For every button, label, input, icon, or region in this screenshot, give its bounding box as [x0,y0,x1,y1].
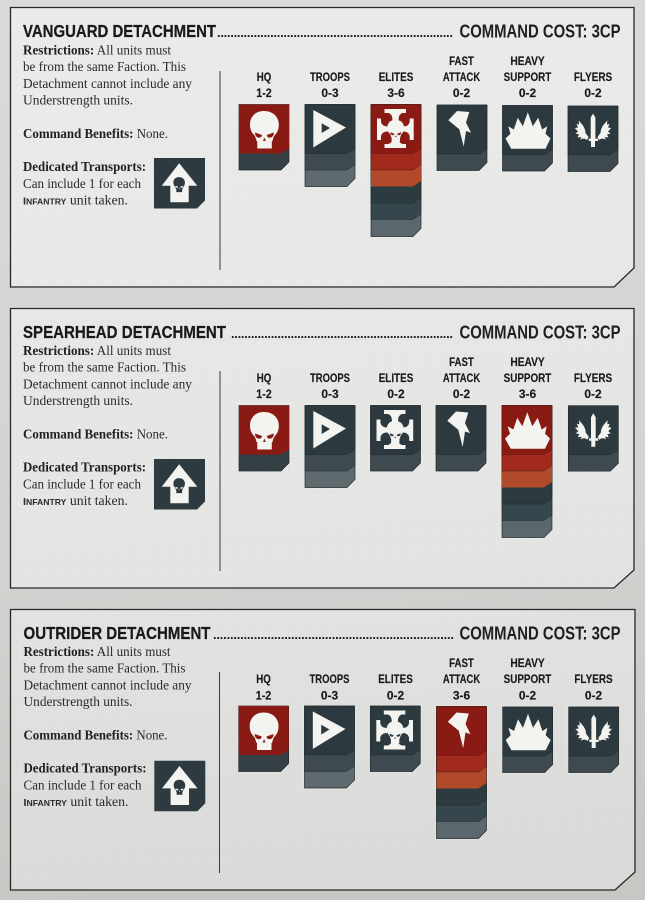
column: Troops: TROOPS [310,372,350,385]
column: Flyers: FLYERS [574,372,612,385]
column: Heavy Support: 3-6 [519,388,537,401]
column: Heavy Support: 0-2 [519,87,536,100]
column: Fast Attack: 3-6 [453,689,471,702]
column: Heavy Support [502,55,552,171]
text: restrictions [24,644,192,709]
leader dots: ................................................................... [231,326,453,341]
column: Flyers [568,372,618,471]
column: Troops: 0-3 [321,689,339,702]
column: Elites: 0-2 [387,388,405,401]
text: dedicated transports: Can include 1 for each [24,778,142,792]
column: Elites [370,673,420,772]
text: command benefits: Command Benefits: None. [23,126,168,141]
icon: dedicated transport arrow [154,158,205,208]
text: command benefits: Command Benefits: None. [23,426,168,442]
column: Troops [304,673,354,788]
heading: VANGUARD DETACHMENT [23,21,216,41]
text: dedicated transports: Can include 1 for each [23,176,141,191]
column: Fast Attack: ATTACK [443,71,481,84]
panel: outrider detachment [10,610,635,890]
column: Elites [371,71,421,236]
column: Fast Attack: 0-2 [453,87,470,100]
column: Troops: TROOPS [310,71,350,84]
text: restrictions: Understrength units. [23,92,133,108]
column: Elites: ELITES [379,71,414,84]
column: Elites: 0-2 [387,689,404,702]
column: Flyers: 0-2 [584,388,602,401]
column: HQ [239,71,289,170]
icon: dedicated transport arrow [154,459,205,510]
column: Fast Attack [436,657,486,838]
column: Troops [305,71,355,186]
text: dedicated transports: INFANTRY unit taken. [23,493,128,508]
column: Troops: 0-3 [321,87,339,100]
divider [218,672,220,873]
column: Flyers [568,71,618,172]
text: restrictions: be from the same Faction. This [23,59,186,74]
panel frame [10,8,634,287]
text: restrictions: be from the same Faction. This [23,360,186,374]
column: Flyers: FLYERS [574,71,612,84]
text: restrictions: Restrictions: All units must [23,343,171,358]
column: Fast Attack: ATTACK [443,372,481,385]
column: Elites: ELITES [379,372,414,385]
column: Heavy Support [503,657,553,772]
text: restrictions: Understrength units. [23,393,133,408]
column: Heavy Support: 0-2 [519,689,536,702]
text: dedicated transports [23,159,146,208]
column: Elites [370,372,420,471]
column: Fast Attack: ATTACK [443,673,481,686]
panel frame [10,308,634,588]
column: HQ: HQ [257,71,271,84]
grid texture [10,8,634,287]
column: Heavy Support: SUPPORT [504,372,551,385]
grid texture [10,610,635,890]
column: Flyers: 0-2 [585,689,602,702]
column: Heavy Support: HEAVY [510,657,545,670]
column: Heavy Support: HEAVY [510,356,545,369]
icon: dedicated transport arrow [154,761,205,811]
column: Heavy Support: HEAVY [510,55,545,68]
grid texture [10,308,634,588]
column: Fast Attack [436,356,486,471]
divider [219,71,221,270]
column: Flyers: FLYERS [574,673,613,686]
column: Elites: 3-6 [387,87,405,100]
column: HQ: 1-2 [256,388,272,401]
text: dedicated transports: Can include 1 for each [23,476,141,492]
column: HQ: 1-2 [256,87,272,100]
text: restrictions: Detachment cannot include any [24,678,192,692]
column: Elites: ELITES [378,673,413,686]
column: Troops: 0-3 [321,388,339,401]
column: HQ: HQ [257,372,271,385]
text: restrictions: Detachment cannot include any [23,76,192,91]
column: HQ: HQ [256,673,271,686]
column: Troops [305,372,355,488]
text: restrictions: be from the same Faction. This [24,660,186,676]
panel: spearhead detachment [10,308,634,588]
column: Fast Attack: FAST [449,356,474,369]
text: restrictions: Restrictions: All units must [23,42,171,58]
text: restrictions [23,42,192,108]
text: dedicated transports: Dedicated Transports: [23,159,146,174]
column: Heavy Support: SUPPORT [504,673,551,686]
column: Fast Attack: 0-2 [453,388,470,401]
text: dedicated transports [23,460,146,508]
text: restrictions: Detachment cannot include any [23,376,192,392]
column: Fast Attack [437,55,487,170]
text: dedicated transports: Dedicated Transports: [23,460,146,474]
heading: OUTRIDER DETACHMENT [24,623,211,643]
text: dedicated transports [24,760,146,809]
text: restrictions: Understrength units. [24,694,132,709]
column: Troops: TROOPS [310,673,350,686]
text: command benefits: Command Benefits: None. [24,728,168,742]
panel frame [10,610,635,890]
column: Heavy Support [502,356,552,538]
heading: SPEARHEAD DETACHMENT [23,322,226,342]
column: HQ: 1-2 [256,689,271,702]
text: dedicated transports: INFANTRY unit taken. [24,794,128,809]
column: Heavy Support: SUPPORT [504,71,551,84]
text: dedicated transports: Dedicated Transports: [24,760,146,776]
text: restrictions: Restrictions: All units must [24,644,171,659]
divider [219,371,221,571]
text: dedicated transports: INFANTRY unit taken. [23,192,128,208]
panel: vanguard detachment [10,8,634,287]
column: Flyers: 0-2 [584,87,602,100]
column: Fast Attack: FAST [449,55,474,68]
column: HQ [239,673,289,772]
text: restrictions [23,343,192,408]
leader dots: ....................................................................... [213,627,454,642]
leader dots: ....................................................................... [217,25,453,40]
column: Flyers [569,673,619,772]
column: Fast Attack: FAST [449,657,474,670]
column: HQ [239,372,289,471]
